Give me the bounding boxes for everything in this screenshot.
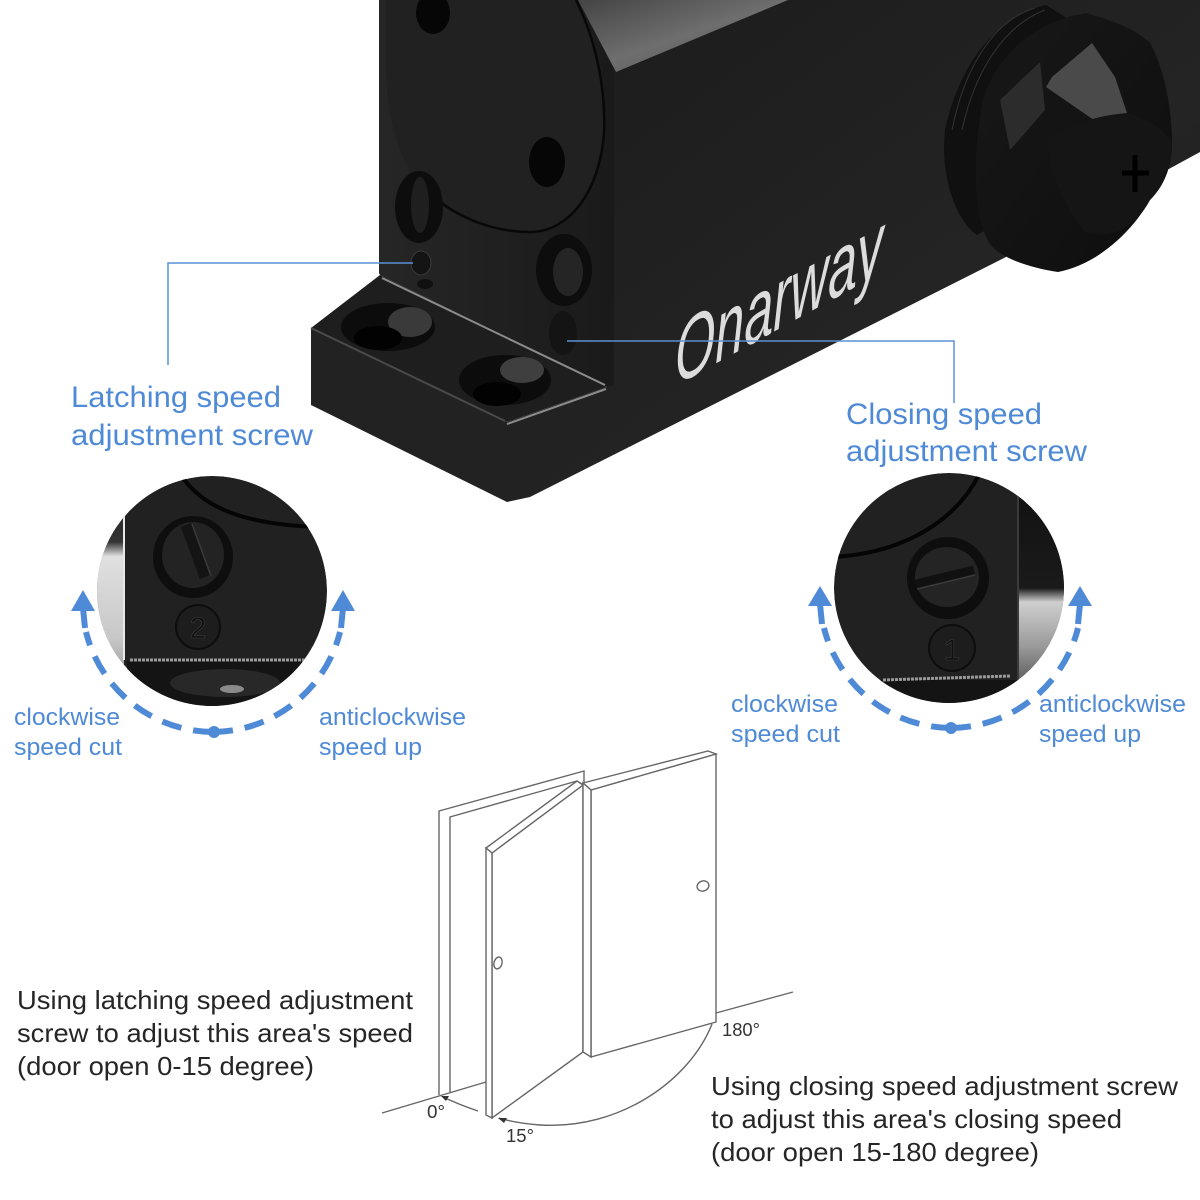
leader line: latching screw [168, 263, 413, 365]
body front face [379, 0, 614, 387]
threaded neck [944, 5, 1070, 235]
heading: latching speed adjustment screw: adjustment screw [71, 419, 313, 452]
label: anticlockwise speed up: anticlockwise [319, 704, 466, 731]
end plate [386, 0, 604, 232]
label: clockwise speed cut [731, 691, 840, 748]
rotation arrows: latching [71, 590, 355, 738]
text: latching speed explanation: screw to adjust this area's speed [17, 1018, 413, 1048]
label: clockwise speed cut [14, 704, 122, 761]
body side face [507, 0, 1200, 502]
leader line: closing screw [567, 341, 954, 403]
heading: latching speed adjustment screw [71, 381, 313, 452]
swing arcs [441, 1024, 712, 1125]
label: anticlockwise speed up [1039, 691, 1186, 748]
text: closing speed explanation: to adjust this area's closing speed [711, 1104, 1122, 1134]
door diagram [382, 751, 793, 1125]
text: latching speed explanation: (door open 0-15 degree) [17, 1051, 314, 1081]
angle labels: 180° [722, 1020, 760, 1040]
adjustment screw holes [395, 171, 592, 355]
open door at 180 degrees [583, 751, 716, 1057]
text: closing speed explanation: (door open 15-180 degree) [711, 1137, 1039, 1167]
label: anticlockwise speed up: speed up [1039, 721, 1141, 748]
detail circle: closing screw 1 [830, 470, 1066, 710]
screw slot ring [907, 537, 989, 619]
label: clockwise speed cut: speed cut [14, 734, 122, 761]
ground line [382, 992, 793, 1113]
text: latching speed explanation: Using latching speed adjustment [17, 985, 414, 1015]
detail circle: latching screw 2 [95, 470, 327, 711]
number mark 1 [929, 625, 975, 671]
label: clockwise speed cut: speed cut [731, 721, 840, 748]
end cap [975, 13, 1172, 272]
rotation arrows: closing [808, 586, 1092, 734]
heading: latching speed adjustment screw: Latching speed [71, 381, 281, 414]
angle labels: 0° [427, 1102, 445, 1122]
door frame [439, 771, 584, 1095]
label: anticlockwise speed up: speed up [319, 734, 422, 761]
brand text: Onarway [675, 192, 886, 405]
label: anticlockwise speed up [319, 704, 466, 761]
product photo: door closer body [311, 0, 1200, 502]
label: anticlockwise speed up: anticlockwise [1039, 691, 1186, 718]
screw slot ring [153, 516, 233, 598]
label: clockwise speed cut: clockwise [14, 704, 120, 731]
number mark 1: 1 [944, 634, 960, 667]
mounting foot [311, 275, 607, 502]
text: closing speed explanation [711, 1071, 1178, 1167]
text: latching speed explanation [17, 985, 414, 1081]
heading: closing speed adjustment screw [846, 398, 1087, 468]
open door at 15 degrees [486, 781, 583, 1118]
label: clockwise speed cut: clockwise [731, 691, 838, 718]
angle labels [427, 1020, 760, 1146]
heading: closing speed adjustment screw: Closing speed [846, 398, 1042, 431]
number mark 2: 2 [190, 612, 206, 645]
top textured face [578, 0, 788, 72]
heading: closing speed adjustment screw: adjustment screw [846, 435, 1087, 468]
text: closing speed explanation: Using closing speed adjustment screw [711, 1071, 1178, 1101]
plate holes [416, 0, 450, 34]
angle labels: 15° [506, 1126, 534, 1146]
number mark 2 [176, 605, 220, 649]
